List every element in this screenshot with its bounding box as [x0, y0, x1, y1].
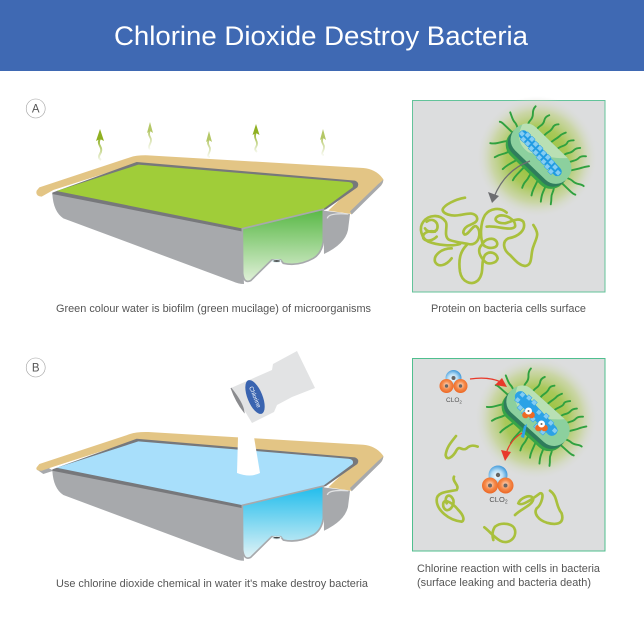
molecule ClO2 large: CLO — [489, 495, 505, 504]
pool with green biofilm water — [36, 155, 383, 284]
arrow: protein leaving cell — [488, 161, 530, 203]
section marker B: B — [32, 362, 40, 374]
section marker A — [26, 99, 45, 118]
caption B left: Use chlorine dioxide chemical in water it's make destroy bacteria — [56, 578, 369, 590]
molecule ClO2 small: 2 — [459, 400, 462, 404]
chlorine powder stream — [237, 437, 260, 476]
panel: protein on bacteria — [412, 94, 605, 292]
pool with blue treated water — [36, 432, 383, 561]
caption B right: (surface leaking and bacteria death) — [417, 577, 591, 589]
arrow: molecule into bacterium — [470, 378, 507, 387]
halo around bacterium B — [474, 356, 598, 480]
molecule ClO2 large — [482, 466, 514, 506]
molecules inside bacterium — [522, 408, 548, 431]
rising vapour arrows A — [96, 122, 326, 160]
leaking cell contents — [521, 424, 527, 438]
chlorine bag — [231, 351, 315, 423]
bacterium A — [477, 94, 602, 218]
bacterium B — [474, 356, 600, 480]
title banner — [0, 0, 644, 71]
title: Chlorine Dioxide Destroy Bacteria — [114, 21, 529, 51]
molecule ClO2 large: 2 — [505, 500, 508, 506]
section marker A: A — [32, 104, 40, 116]
broken protein fragments — [437, 436, 562, 542]
panel: chlorine reaction — [412, 356, 605, 551]
halo around bacterium A — [476, 96, 598, 218]
molecule ClO2 small — [440, 370, 468, 404]
caption A left: Green colour water is biofilm (green mucilage) of microorganisms — [56, 303, 371, 315]
section marker B — [26, 358, 45, 377]
arrow: molecule leaving bacterium — [501, 433, 522, 461]
tangled protein strands — [421, 198, 537, 283]
bag label: Chlorine — [247, 386, 261, 409]
caption B right: Chlorine reaction with cells in bacteria — [417, 563, 601, 575]
caption B right — [417, 563, 601, 589]
caption A right: Protein on bacteria cells surface — [431, 303, 586, 315]
molecule ClO2 small: CLO — [446, 397, 459, 404]
